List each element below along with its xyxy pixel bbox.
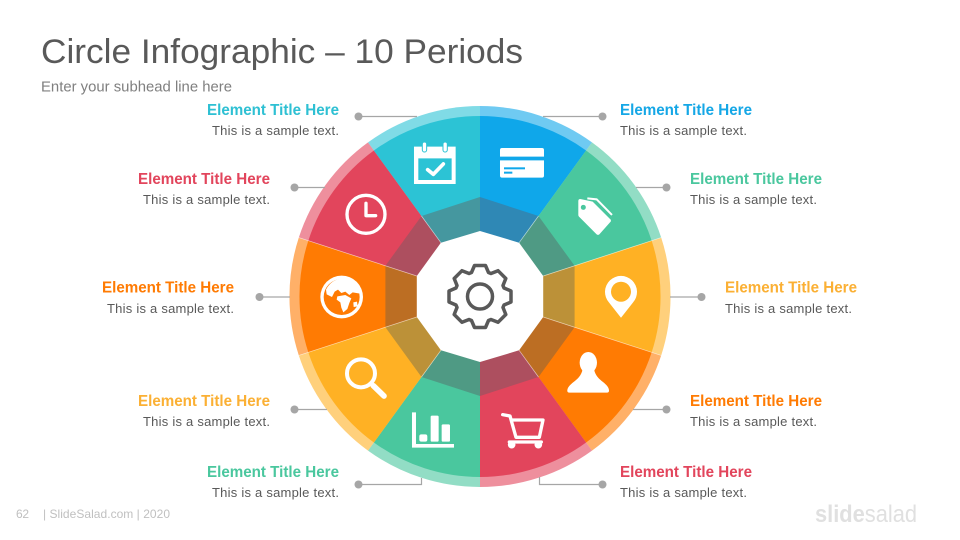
- footer: source: | SlideSalad.com | 2020: [43, 507, 170, 521]
- label: bottom right: This is a sample text.: [620, 485, 747, 500]
- label: bottom left: [207, 464, 422, 500]
- label: upper left: Element Title Here: [138, 171, 270, 188]
- label: middle left: [102, 280, 290, 316]
- segment: yellow left: [299, 296, 480, 451]
- icon: bar chart: [412, 412, 454, 448]
- label: upper left: [138, 171, 325, 207]
- circle diagram: [289, 106, 671, 487]
- icon: shopping cart: [503, 415, 543, 448]
- label: middle left: Element Title Here: [102, 280, 234, 296]
- segment: blue: [480, 106, 592, 296]
- label: bottom right: Element Title Here: [620, 464, 752, 481]
- icon: credit card: [500, 148, 544, 178]
- segment: red upper: [299, 142, 480, 296]
- segment: orange right: [480, 296, 661, 451]
- footer: page number: 62: [16, 507, 29, 521]
- logo: slidesalad: slidesalad: [815, 501, 917, 528]
- label: upper right: Element Title Here: [690, 171, 822, 188]
- label: lower right: This is a sample text.: [690, 414, 817, 429]
- label: bottom right: [540, 464, 752, 500]
- label: bottom left: Element Title Here: [207, 464, 339, 481]
- label: upper left: This is a sample text.: [143, 192, 270, 207]
- label: top right: This is a sample text.: [620, 123, 747, 138]
- label: lower left: [138, 393, 327, 429]
- label: upper right: This is a sample text.: [690, 192, 817, 207]
- title: Circle Infographic – 10 Periods: [41, 33, 523, 71]
- icon: gear: [449, 266, 511, 328]
- icon: person: [567, 352, 609, 393]
- label: middle right: Element Title Here: [725, 280, 857, 296]
- icon: calendar: [414, 142, 456, 184]
- label: top right: [543, 102, 752, 138]
- label: top left: [207, 102, 417, 138]
- icon: map pin: [605, 276, 637, 318]
- label: middle right: This is a sample text.: [725, 301, 852, 316]
- segment: green lower: [368, 296, 480, 487]
- label: lower left: Element Title Here: [138, 393, 270, 410]
- label: top right: Element Title Here: [620, 102, 752, 119]
- segment: teal: [368, 106, 480, 296]
- label: top left: Element Title Here: [207, 102, 339, 119]
- label: upper right: [636, 171, 822, 207]
- segment: green upper: [480, 142, 661, 296]
- label: lower right: Element Title Here: [690, 393, 822, 410]
- segment: red lower: [480, 296, 592, 487]
- label: lower left: This is a sample text.: [143, 414, 270, 429]
- label: middle right: [670, 280, 857, 316]
- icon: globe: [320, 276, 363, 318]
- segment: orange left: [289, 238, 480, 355]
- label: lower right: [633, 393, 822, 429]
- center decagon: [417, 231, 543, 362]
- icon: clock: [347, 195, 385, 233]
- subhead: Enter your subhead line here: [41, 80, 232, 96]
- icon: magnifier: [347, 359, 384, 396]
- label: middle left: This is a sample text.: [107, 301, 234, 316]
- icon: price tag: [578, 198, 612, 235]
- segment: yellow right: [480, 238, 671, 355]
- label: top left: This is a sample text.: [212, 123, 339, 138]
- label: bottom left: This is a sample text.: [212, 485, 339, 500]
